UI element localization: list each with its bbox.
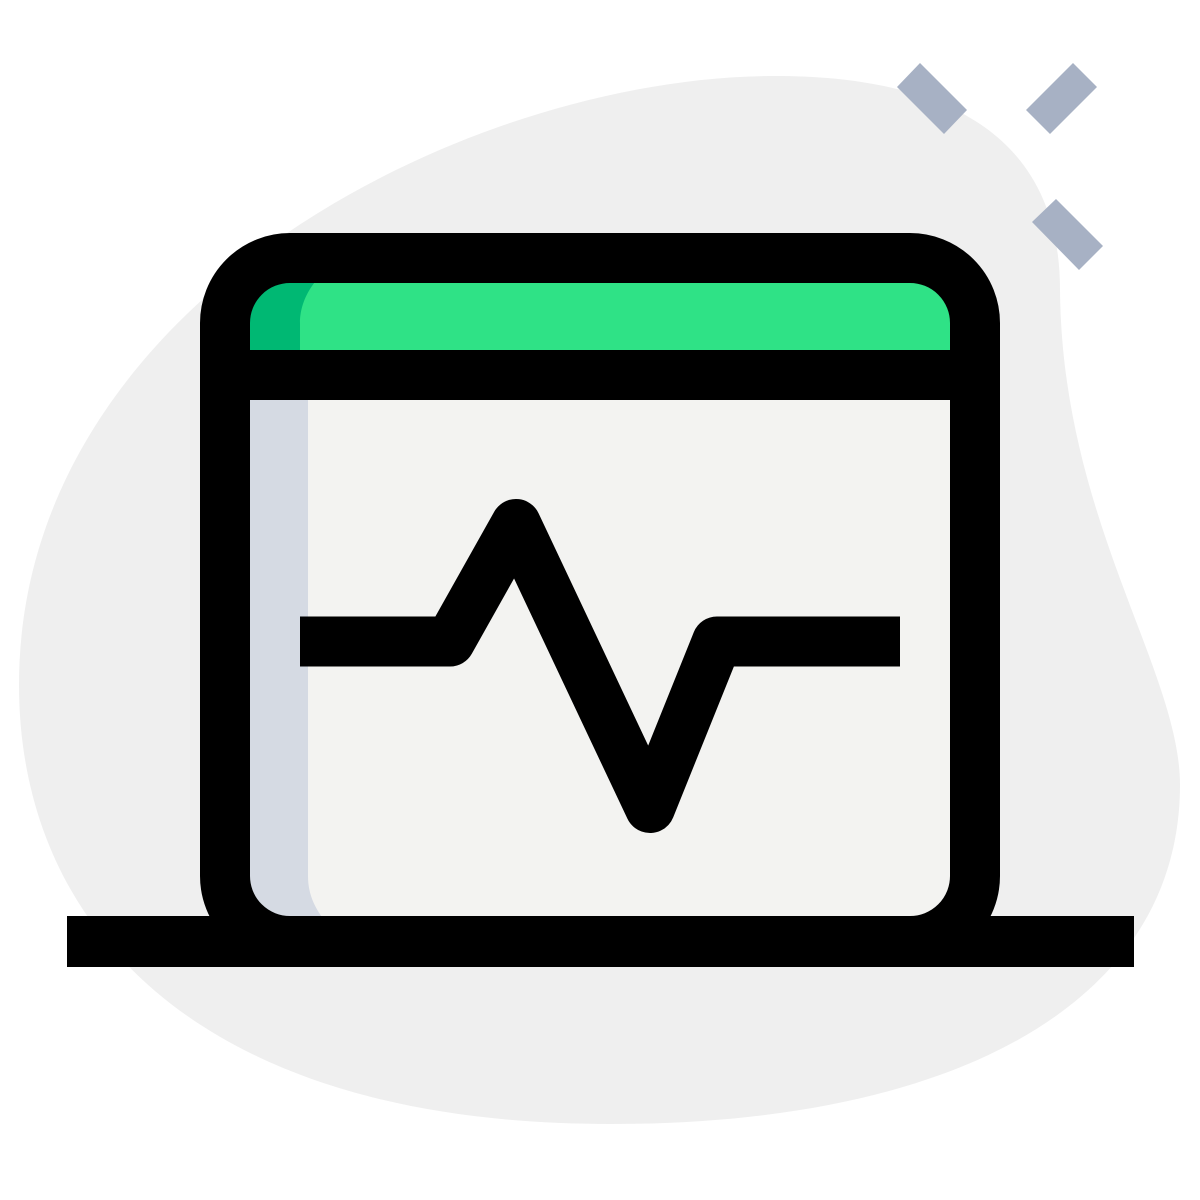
sparkle marks [897, 63, 1103, 270]
pulse line [300, 524, 900, 808]
title bar left shade [225, 258, 345, 375]
title bar [225, 258, 975, 375]
title bar divider [225, 350, 975, 400]
window outline [225, 258, 975, 941]
window left shade [225, 375, 345, 941]
baseline [67, 916, 1134, 967]
window body fill [225, 375, 975, 941]
